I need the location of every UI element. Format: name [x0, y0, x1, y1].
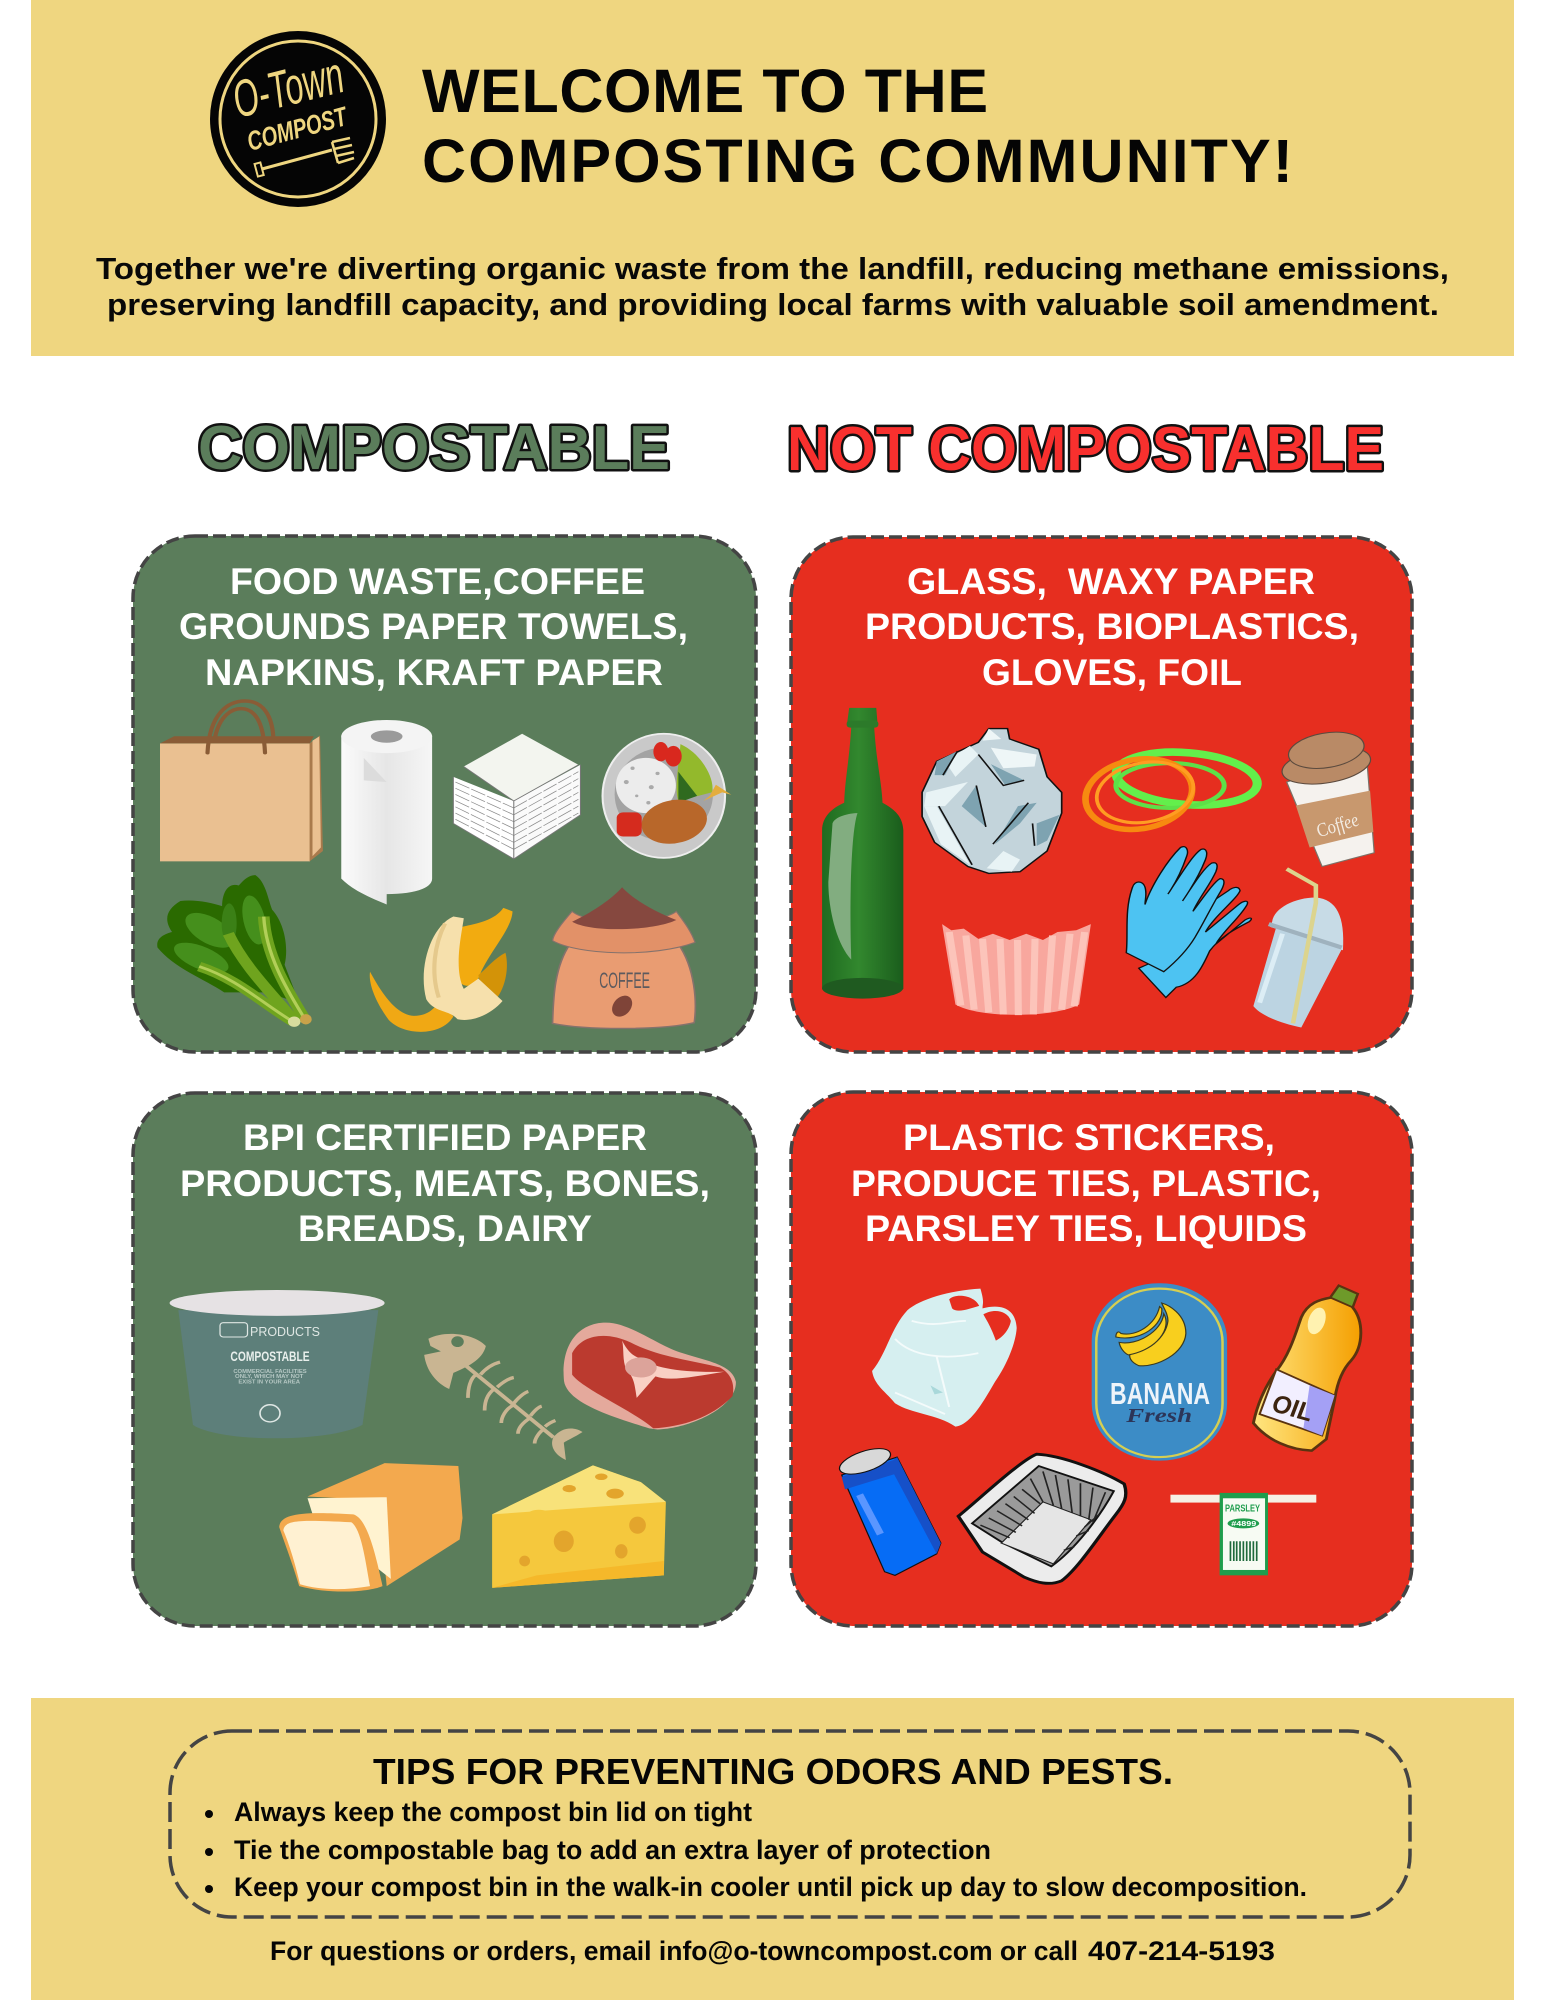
- panel: not compostable glass and foil: [791, 537, 1412, 1052]
- icon: compostable paper bowl: COMMERCIAL FACILITIES: [233, 1369, 307, 1375]
- icon: parsley tie: PARSLEY: [1225, 1503, 1260, 1515]
- intro text: [96, 251, 1449, 322]
- icon: raw steak: [564, 1323, 736, 1429]
- icon: paper towel roll: [341, 720, 432, 904]
- panel heading: GLASS, WAXY PAPER: [907, 561, 1315, 602]
- icon: coffee sack: [553, 887, 695, 1028]
- logo: O-Town Compost: O-Town: [227, 46, 350, 130]
- icon: cheese wedge: [492, 1465, 666, 1588]
- icon: parsley tie: [1170, 1493, 1316, 1575]
- panel heading: PARSLEY TIES, LIQUIDS: [865, 1208, 1307, 1249]
- tips list: Always keep the compost bin lid on tight: [234, 1797, 752, 1827]
- icon: napkin stack: [453, 734, 580, 859]
- panel heading: GROUNDS PAPER TOWELS,: [179, 606, 688, 647]
- icon: rubber bands: [1075, 747, 1260, 840]
- icon: banana sticker: BANANA: [1110, 1378, 1210, 1411]
- icon: compostable paper bowl: EXIST IN YOUR AREA: [238, 1380, 301, 1385]
- icon: banana sticker: [1092, 1283, 1227, 1461]
- icon: fish bones: [424, 1334, 583, 1460]
- tips list: Tie the compostable bag to add an extra layer of protection: [234, 1835, 991, 1865]
- panel heading: [179, 561, 688, 693]
- icon: blue gloves: [1126, 847, 1251, 998]
- panel: not compostable plastics and liquids: [791, 1092, 1412, 1626]
- icon: sliced bread: [279, 1463, 463, 1592]
- logo: O-Town Compost: [210, 31, 386, 207]
- panel heading: PRODUCTS, BIOPLASTICS,: [865, 606, 1359, 647]
- panel heading: PRODUCTS, MEATS, BONES,: [180, 1163, 710, 1204]
- icon: compostable paper bowl: PRODUCTS: [250, 1325, 320, 1339]
- panel: compostable food waste: [133, 536, 756, 1052]
- icon: plastic cup with straw: [1253, 869, 1343, 1028]
- logo: O-Town Compost: COMPOST: [244, 101, 352, 157]
- panel heading: NAPKINS, KRAFT PAPER: [205, 652, 663, 693]
- heading: compostable: COMPOSTABLE: [198, 414, 670, 483]
- icon: compostable paper bowl: [170, 1290, 385, 1438]
- icon: blue can: [836, 1443, 941, 1575]
- panel heading: [180, 1117, 710, 1249]
- panel: header banner: [31, 0, 1514, 356]
- title: [422, 57, 1293, 195]
- title: COMPOSTING COMMUNITY!: [422, 127, 1293, 195]
- panel heading: GLOVES, FOIL: [982, 652, 1242, 693]
- panel heading: PRODUCE TIES, PLASTIC,: [851, 1163, 1321, 1204]
- icon: crumpled foil ball: [922, 729, 1062, 873]
- icon: plastic bag: [872, 1289, 1017, 1427]
- panel heading: PLASTIC STICKERS,: [903, 1117, 1275, 1158]
- icon: oil bottle: [1253, 1286, 1361, 1451]
- icon: foil tray: [958, 1454, 1126, 1583]
- title: WELCOME TO THE: [422, 57, 988, 125]
- icon: banana sticker: Fresh: [1125, 1406, 1192, 1427]
- panel: footer banner: [31, 1698, 1514, 2000]
- icon: banana peel: [370, 908, 513, 1032]
- icon: oil bottle: OIL: [1268, 1390, 1317, 1427]
- panel heading: BPI CERTIFIED PAPER: [243, 1117, 647, 1158]
- contact line: For questions or orders, email info@o-towncompost.com or call: [270, 1936, 1078, 1966]
- panel heading: [851, 1117, 1321, 1249]
- panel heading: FOOD WASTE,COFFEE: [230, 561, 645, 602]
- callout: tips: [170, 1731, 1410, 1917]
- icon: parsley tie: #4899: [1231, 1519, 1256, 1528]
- panel heading: [865, 561, 1359, 693]
- tips list: [205, 1797, 1307, 1902]
- panel: compostable certified paper and food: [133, 1093, 756, 1626]
- intro text: Together we're diverting organic waste from the landfill, reducing methane emissions,: [96, 251, 1449, 286]
- contact line: 407-214-5193: [1088, 1936, 1275, 1966]
- icon: paper bag: [160, 701, 323, 861]
- icon: waxy cupcake liner: [942, 924, 1091, 1015]
- icon: takeaway coffee cup: [1278, 727, 1375, 867]
- heading: not compostable: NOT COMPOSTABLE: [787, 415, 1384, 484]
- icon: spinach: [157, 875, 312, 1027]
- icon: takeaway coffee cup: Coffee: [1313, 810, 1363, 842]
- icon: compostable paper bowl: COMPOSTABLE: [230, 1349, 310, 1364]
- tips list: Keep your compost bin in the walk-in cooler until pick up day to slow decomposition.: [234, 1872, 1307, 1902]
- panel heading: BREADS, DAIRY: [298, 1208, 592, 1249]
- tips heading: TIPS FOR PREVENTING ODORS AND PESTS.: [373, 1751, 1173, 1792]
- icon: green glass bottle: [822, 708, 903, 999]
- icon: compostable paper bowl: ONLY, WHICH MAY NOT: [235, 1375, 304, 1380]
- intro text: preserving landfill capacity, and providing local farms with valuable soil amendment.: [107, 287, 1439, 322]
- icon: coffee sack: COFFEE: [599, 968, 650, 993]
- icon: plate of food: [603, 734, 731, 858]
